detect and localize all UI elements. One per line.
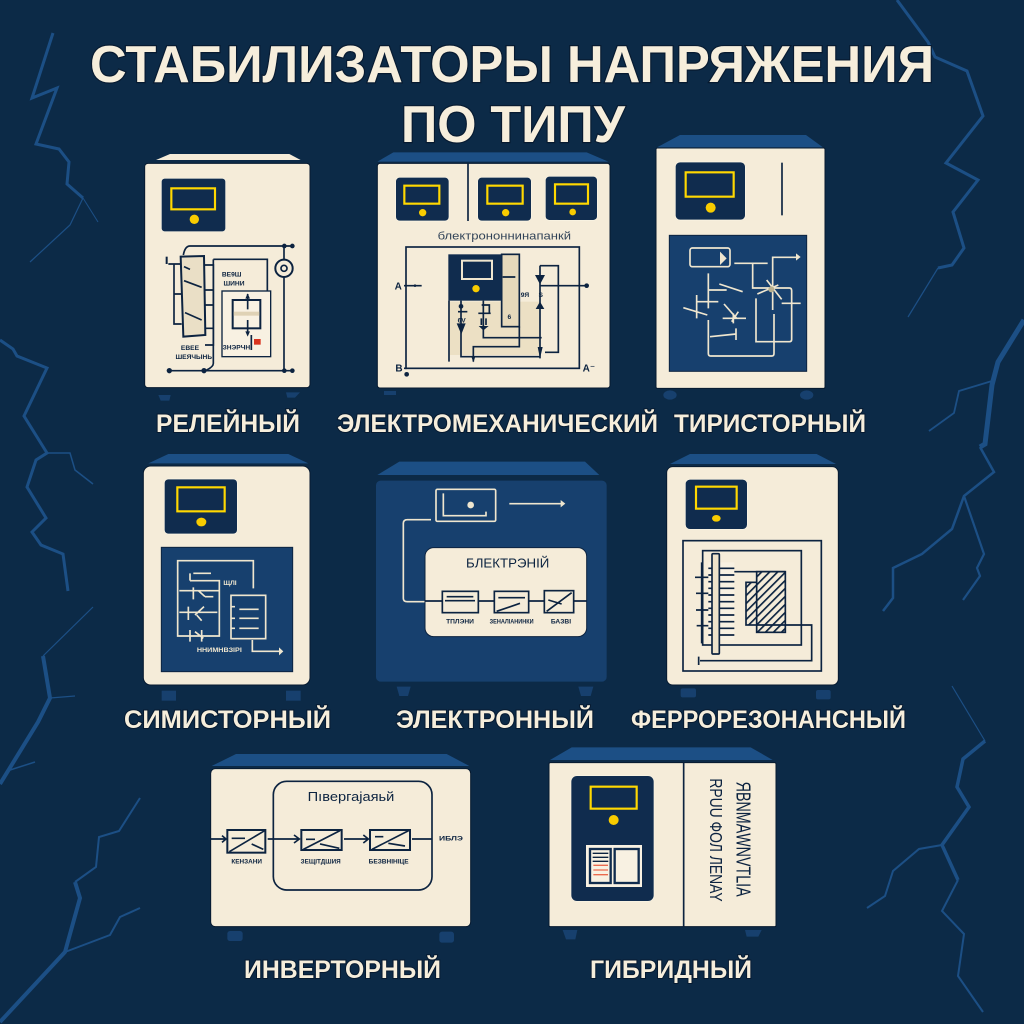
indicator block and output arrow	[403, 489, 565, 602]
label: тиристорный: ТИРИСТОРНЫЙ	[674, 408, 866, 438]
control panel	[571, 776, 654, 901]
control screens	[396, 176, 597, 221]
electromechanical circuit diagram: A	[395, 281, 402, 292]
electromechanical circuit diagram: 6	[507, 314, 511, 321]
relay circuit diagram: ЗНЭРЧНІ	[223, 345, 252, 352]
label: гибридный: ГИБРИДНЫЙ	[590, 954, 752, 984]
vertical side text	[706, 778, 754, 902]
inverter block diagram: ЗЕЩІТДШИЯ	[301, 859, 341, 866]
control screen	[161, 178, 226, 232]
title	[90, 36, 934, 154]
label: электронный: ЭЛЕКТРОННЫЙ	[396, 704, 594, 734]
label: инверторный: ИНВЕРТОРНЫЙ	[244, 954, 441, 984]
electromechanical circuit diagram: B	[395, 363, 403, 374]
electromechanical circuit diagram: 9Я	[521, 292, 529, 299]
panel: электромеханический	[377, 152, 610, 395]
relay circuit diagram: ЕВЕЕ	[181, 345, 200, 352]
vertical side text: RPUU ФОЛ ЛЕNAY	[706, 778, 726, 902]
electromechanical circuit diagram: A⁻	[583, 363, 595, 374]
panel: симисторный	[143, 454, 310, 701]
triac circuit diagram: ННИМНВЗІРІ	[197, 647, 242, 654]
inverter block diagram: КЕНЗАНИ	[231, 859, 262, 866]
inverter block diagram: БЕЗВНІНІЦЕ	[369, 859, 409, 866]
label: симисторный: СИМИСТОРНЫЙ	[124, 704, 331, 734]
relay circuit diagram: ВЕ9Ш	[222, 272, 242, 279]
cabinet roof	[148, 454, 308, 463]
vertical side text: ЯВNМАWNVTLIA	[732, 782, 754, 897]
triac circuit diagram: ЩЛІ	[223, 580, 237, 587]
panel: электронный	[376, 462, 607, 696]
inverter block diagram	[211, 781, 463, 890]
electronic block diagram	[425, 548, 587, 637]
cabinet roof	[212, 754, 469, 766]
electronic block diagram: БЛЕКТРЭНІЙ	[466, 556, 549, 571]
panel: тиристорный	[656, 135, 825, 400]
title: СТАБИЛИЗАТОРЫ НАПРЯЖЕНИЯ	[90, 36, 934, 94]
cabinet body	[376, 481, 607, 682]
panel: феррорезонансный	[667, 454, 838, 699]
electronic block diagram: БАЗВІ	[551, 618, 571, 625]
ferroresonant transformer diagram	[683, 541, 821, 671]
electronic block diagram: ТПЛЭНИ	[446, 618, 474, 625]
control screen	[685, 479, 747, 529]
electromechanical circuit diagram	[395, 247, 595, 377]
control screen	[675, 162, 745, 220]
electromechanical circuit diagram: Ѕ	[538, 292, 543, 299]
title: ПО ТИПУ	[401, 96, 626, 154]
cabinet roof	[377, 462, 599, 475]
inverter block diagram: ИБЛЭ	[439, 835, 463, 842]
cabinet body	[549, 763, 776, 927]
cabinet body	[656, 148, 825, 388]
cabinet body	[211, 769, 471, 927]
panel: инверторный	[211, 754, 471, 943]
cabinet body	[667, 467, 838, 685]
cabinet body	[145, 163, 310, 388]
relay circuit diagram: ШИНИ	[223, 281, 245, 288]
electromechanical circuit diagram: 6V	[458, 317, 466, 324]
cabinet body	[143, 466, 310, 685]
inverter block diagram: Пıвергаjаяьй	[308, 790, 394, 804]
control screen	[164, 479, 237, 534]
cabinet body	[377, 163, 610, 388]
panel: релейный	[145, 154, 310, 401]
label: электромеханический: ЭЛЕКТРОМЕХАНИЧЕСКИЙ	[337, 408, 658, 438]
electronic block diagram: ЗЕНАЛІАНИНКИ	[490, 618, 534, 625]
thyristor circuit diagram	[669, 235, 807, 371]
diagram caption: блектронoннинапанкй	[438, 231, 571, 243]
label: феррорезонансный: ФЕРРОРЕЗОНАНСНЫЙ	[631, 704, 906, 734]
cabinet roof	[377, 152, 608, 162]
relay circuit diagram: ШЕЯЧЫНЫ	[175, 354, 214, 361]
triac circuit diagram	[161, 547, 293, 672]
cabinet roof	[657, 135, 823, 147]
cabinet roof	[670, 454, 836, 464]
panel: гибридный	[549, 747, 776, 939]
relay circuit diagram	[166, 244, 295, 373]
label: релейный: РЕЛЕЙНЫЙ	[156, 408, 300, 438]
cabinet roof	[550, 747, 773, 760]
